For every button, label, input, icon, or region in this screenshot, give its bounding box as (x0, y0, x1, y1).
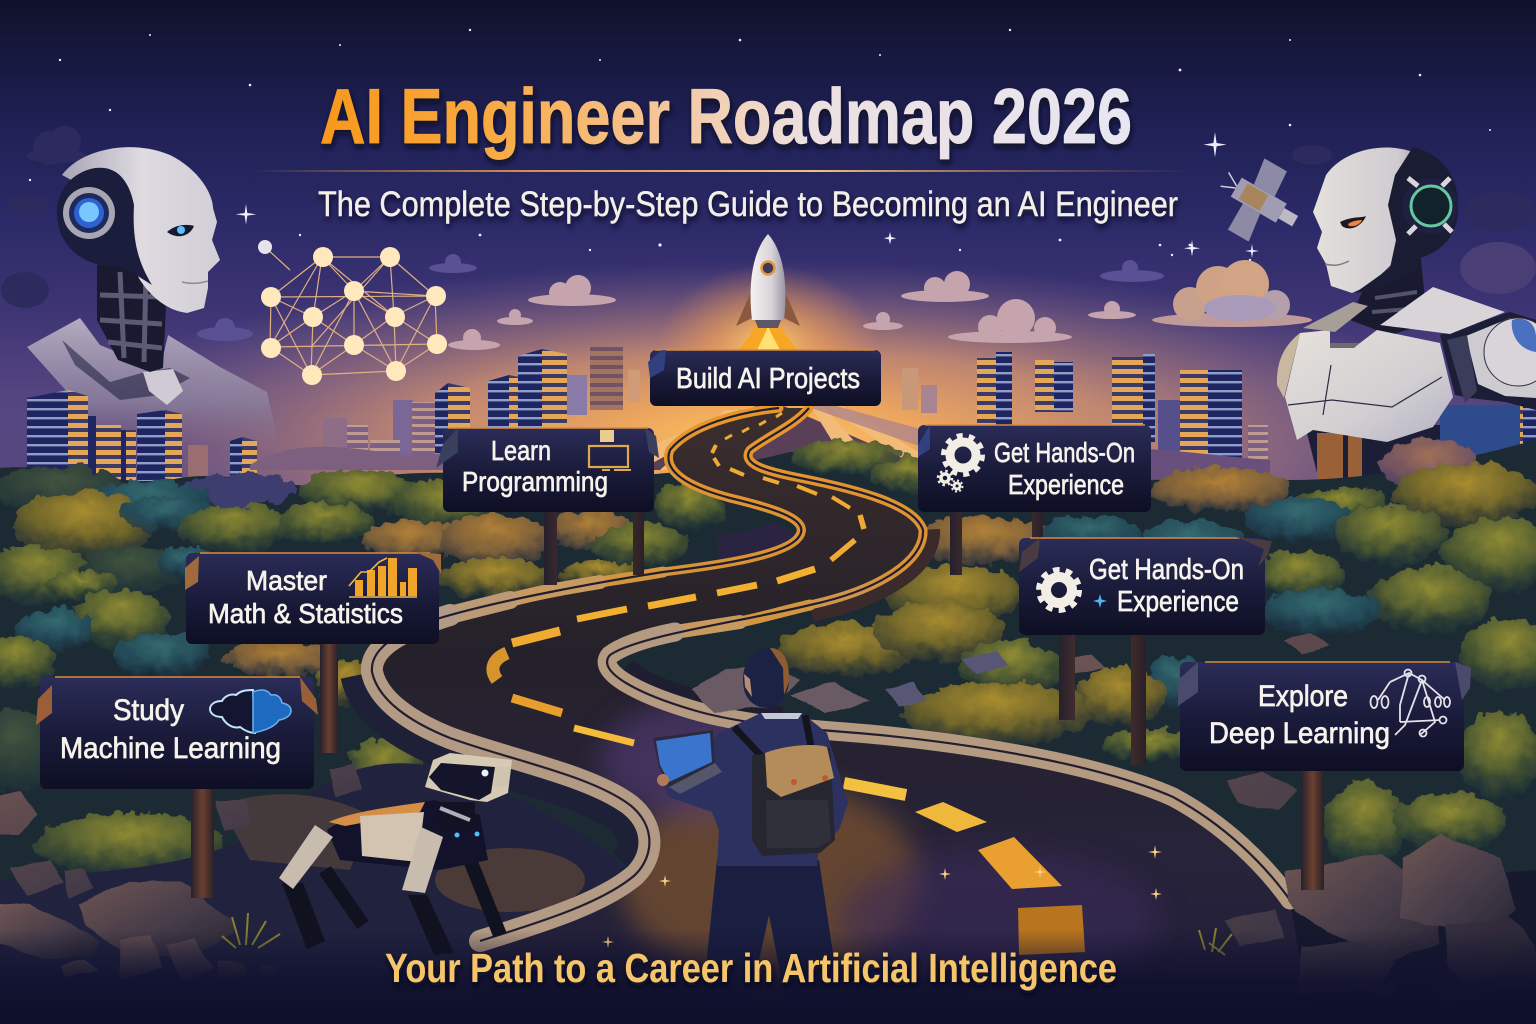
robot dog (279, 753, 512, 955)
backpack straps (734, 715, 811, 759)
middle left road edge (600, 572, 663, 582)
distant hills and light rays (250, 400, 1270, 480)
dog neck (437, 802, 475, 827)
robot shoulders (27, 318, 280, 450)
large foreground dashes (915, 802, 1085, 955)
icon: cloud (210, 690, 291, 733)
satellite (1204, 146, 1315, 257)
robot neck (1350, 250, 1440, 335)
icon: bar chart (349, 558, 417, 597)
board (40, 677, 314, 789)
sign: Build AI Projects (648, 350, 881, 406)
rocks right (1060, 632, 1536, 1003)
robot helmet (57, 168, 152, 285)
sign: Learn Programming (436, 428, 659, 585)
post (191, 780, 214, 898)
sign: Get Hands-On lower: Experience (1117, 586, 1239, 618)
hand (657, 774, 669, 786)
robot eye (1340, 216, 1366, 228)
rocks left (0, 764, 363, 981)
bushes base ground (0, 440, 1536, 1024)
board (1019, 538, 1265, 635)
road centre dashes (493, 413, 906, 795)
upper left road edge (663, 408, 801, 572)
posts (1059, 625, 1146, 765)
sign: Get Hands-On lower (1019, 537, 1272, 765)
winding road (372, 408, 1310, 1024)
post (1301, 765, 1324, 890)
city skyline left (27, 347, 640, 495)
dog rear upper leg (279, 825, 333, 889)
legs (700, 860, 840, 1024)
sign: Learn Programming: Programming (462, 466, 608, 497)
icon: sparkle (1093, 594, 1107, 608)
person with laptop (653, 648, 848, 1024)
sign: Explore Deep Learning: Explore (1258, 680, 1348, 713)
posts (950, 505, 1043, 575)
right road centre line (607, 408, 1290, 900)
sign: Master Math & Statistics: Math & Statistics (208, 598, 403, 629)
tagline: Your Path to a Career in Artificial Intelligence (385, 945, 1117, 991)
robot helmet (1355, 147, 1458, 293)
sign: Study Machine Learning (36, 677, 318, 898)
lower left road band (372, 615, 649, 941)
dog head (425, 753, 512, 802)
sign: Study Machine Learning: Study (113, 694, 184, 727)
sign: Get Hands-On upper: Experience (1008, 469, 1124, 500)
robot mouth (182, 281, 208, 283)
robot eye (167, 225, 194, 236)
robot head (1313, 148, 1435, 293)
sign: Master Math & Statistics: Master (246, 565, 327, 596)
bushes right (775, 439, 1536, 867)
dog far legs (325, 860, 500, 935)
neural network (258, 240, 447, 385)
board (918, 425, 1151, 512)
posts (544, 505, 644, 585)
laptop (653, 730, 722, 794)
board (186, 553, 439, 644)
icon: monitor (589, 430, 631, 470)
clouds (1, 126, 1536, 350)
sign: Learn Programming: Learn (491, 435, 551, 466)
jacket (661, 713, 848, 866)
right robot (1277, 147, 1536, 485)
road retaining walls (372, 530, 923, 875)
sign: Get Hands-On lower: Get Hands-On (1089, 554, 1244, 586)
title rule (250, 170, 1195, 172)
icon: gears (938, 436, 982, 492)
rocks centre (690, 652, 1008, 713)
lower ground (0, 763, 1536, 1024)
left road centre line (372, 408, 801, 941)
sign: Get Hands-On upper (918, 425, 1151, 575)
sign: Get Hands-On upper: Get Hands-On (994, 437, 1135, 468)
sign: Explore Deep Learning (1178, 662, 1471, 890)
rocket glow (658, 265, 878, 425)
robot abdomen (1305, 425, 1480, 485)
dog front upper leg (402, 827, 443, 893)
icon: gear (1039, 570, 1079, 610)
bushes centre (437, 439, 950, 598)
post (320, 635, 338, 753)
subtitle: The Complete Step-by-Step Guide to Becoming an AI Engineer (318, 185, 1178, 224)
stars (29, 29, 1501, 261)
lower right road band (607, 632, 1290, 900)
robot shoulder plates (1380, 287, 1505, 334)
dog body (327, 800, 488, 870)
title: AI Engineer Roadmap 2026 (320, 72, 1132, 160)
robot neck (97, 265, 168, 372)
bottom fade (0, 930, 1536, 1024)
robot headset (1402, 178, 1458, 234)
middle right road edge (740, 605, 810, 622)
rocks (0, 632, 1536, 1003)
background sky (0, 0, 1536, 560)
backpack flap (765, 745, 834, 797)
dog near rear lower leg (282, 883, 325, 949)
hair (743, 648, 789, 708)
rocket (736, 234, 800, 350)
road sparkles (602, 845, 1162, 982)
city skyline right (902, 352, 1536, 465)
robot head (62, 147, 220, 313)
sign: Explore Deep Learning: Deep Learning (1209, 717, 1390, 750)
left robot (27, 147, 280, 450)
icon: neural net (1370, 670, 1450, 736)
board (443, 428, 654, 512)
dog near front lower leg (408, 895, 454, 955)
sign: Study Machine Learning: Machine Learning (60, 732, 281, 765)
backpack (752, 748, 835, 856)
robot mouth (1325, 261, 1349, 265)
sign: Build AI Projects: Build AI Projects (676, 363, 860, 395)
bushes left (0, 466, 495, 877)
robot headset (63, 187, 115, 239)
robot chest (1285, 330, 1453, 442)
upper right road edge (748, 408, 923, 605)
grass tufts (222, 913, 1232, 955)
board (1180, 662, 1464, 771)
robot arm (1440, 312, 1536, 410)
sign: Master Math & Statistics (185, 552, 441, 753)
